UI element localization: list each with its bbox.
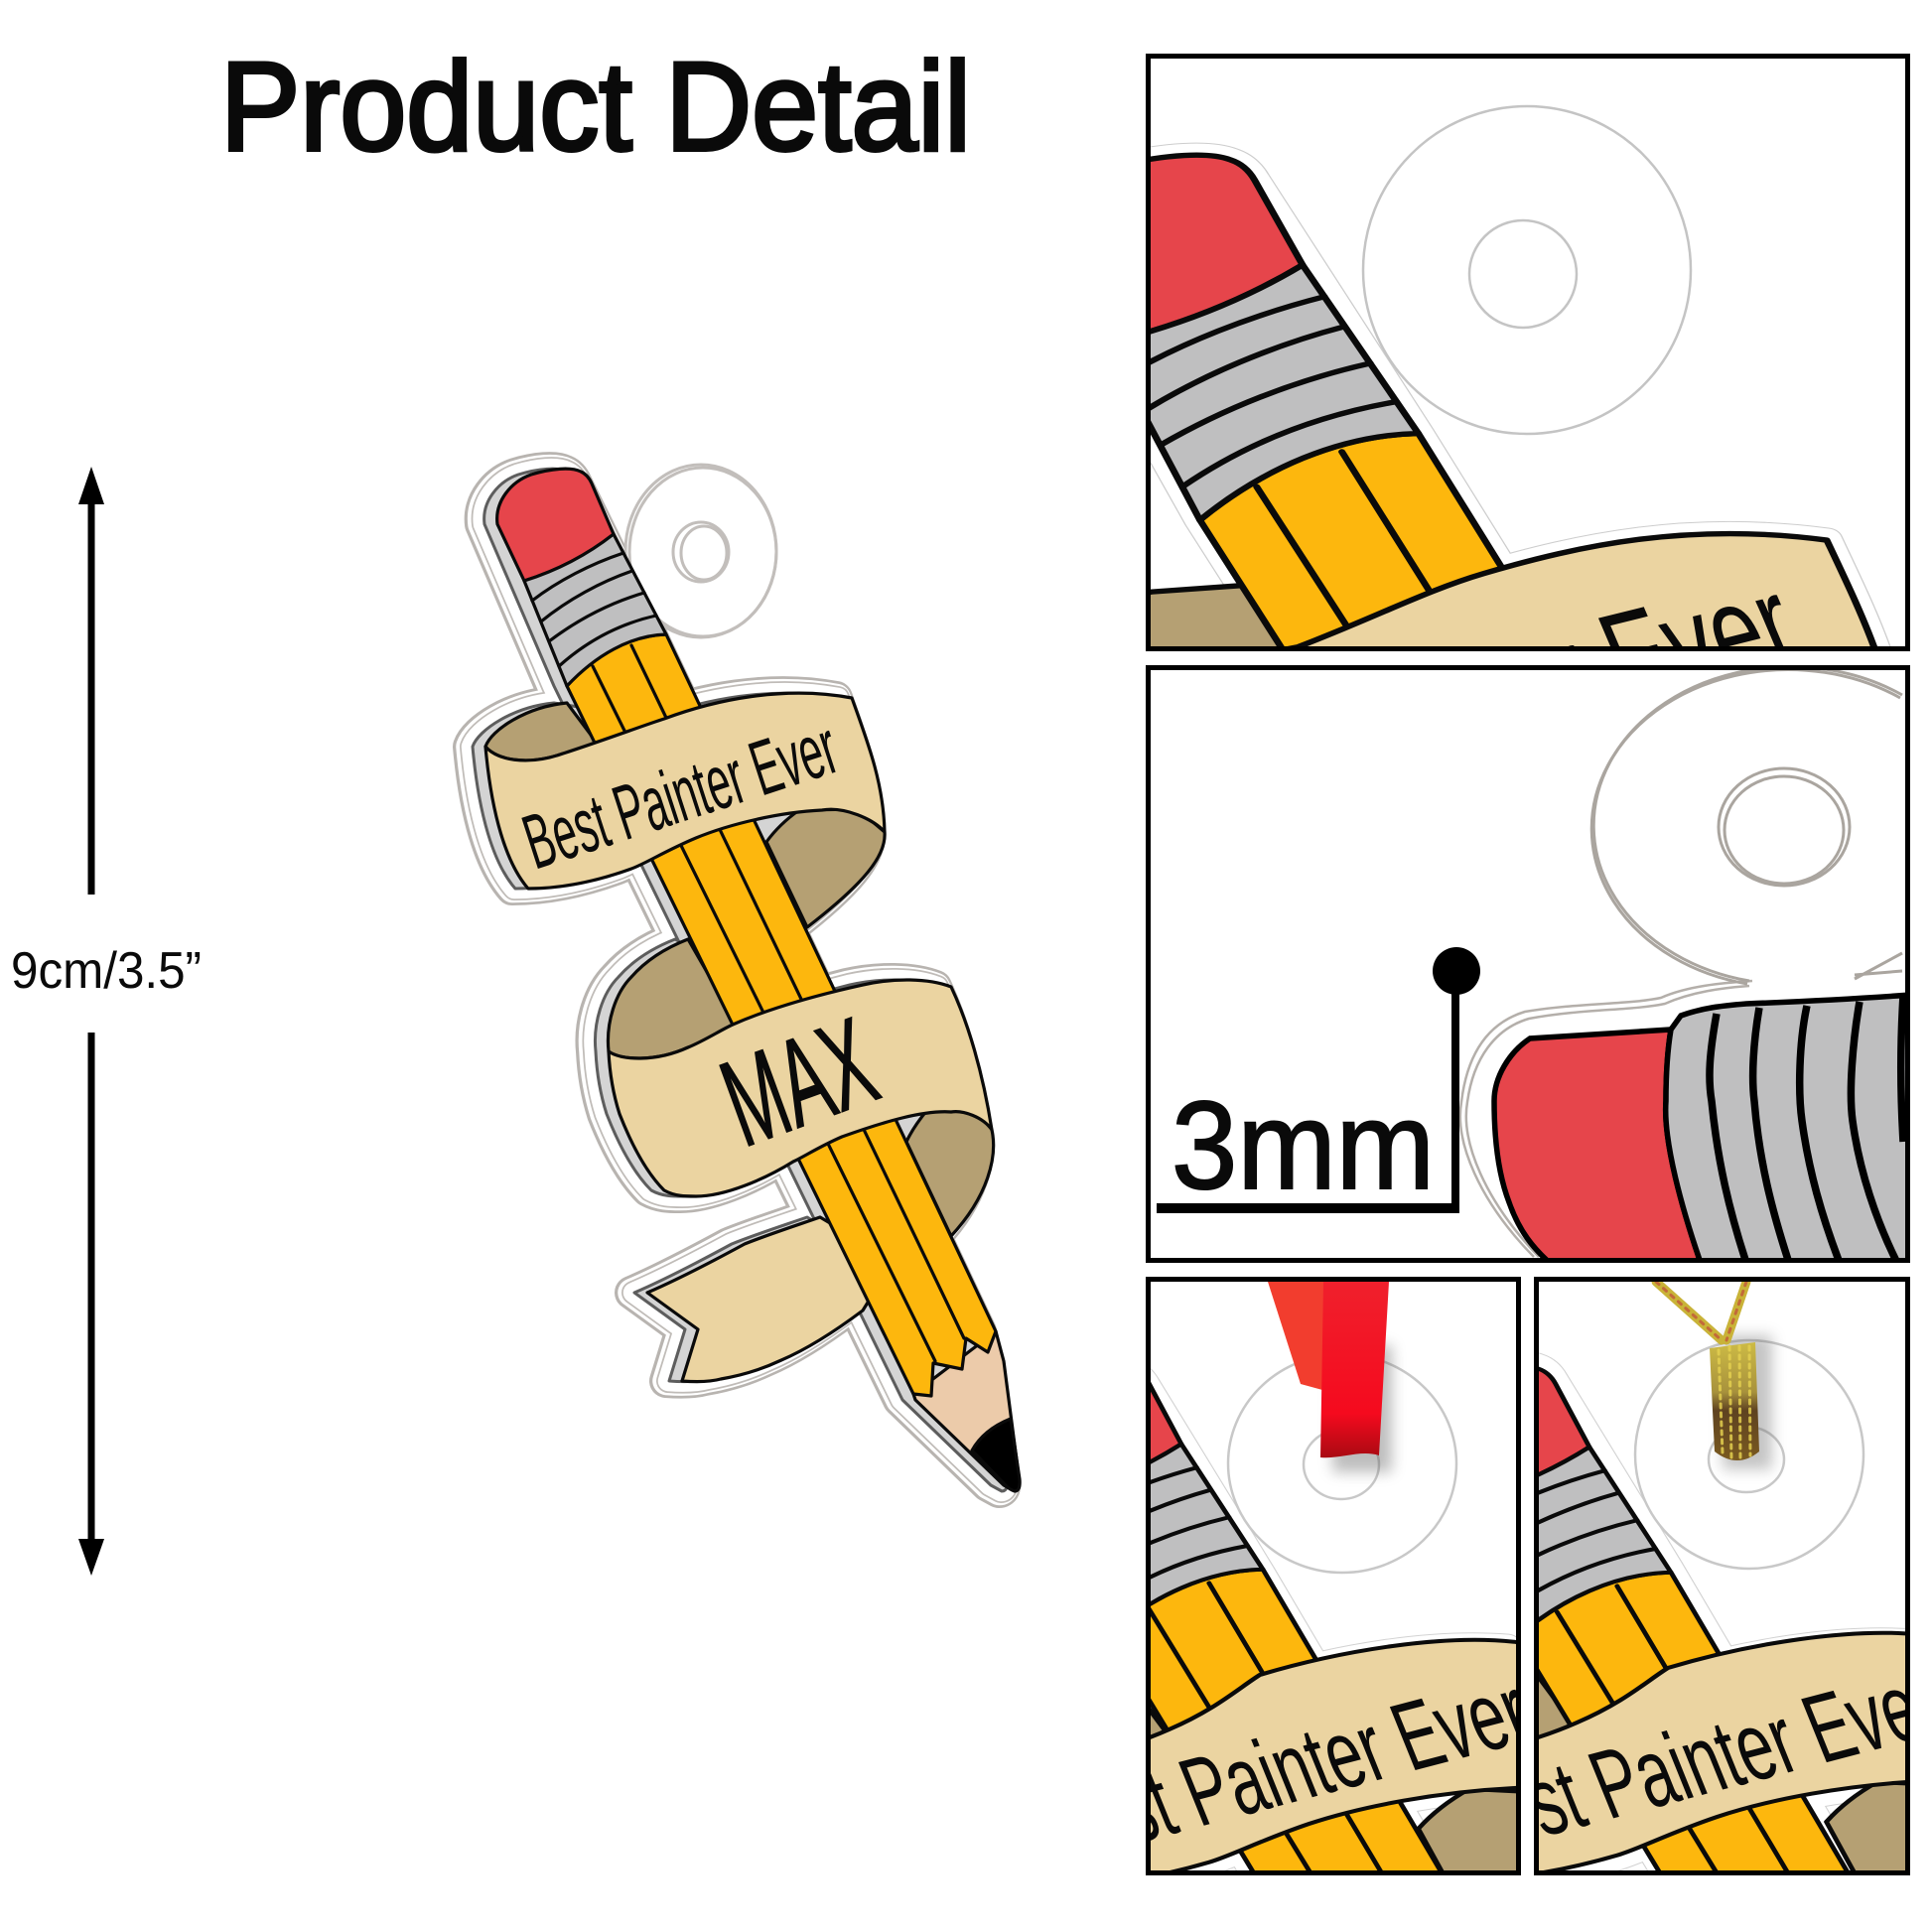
disc with hole — [1363, 106, 1691, 434]
ferrule — [1666, 995, 1911, 1263]
pencil close-up — [1539, 1366, 1905, 1870]
pencil close-up: Best Painter Ever — [1027, 1656, 1545, 1883]
banner text: MAX: MAX — [706, 992, 893, 1173]
red ribbon — [1268, 1282, 1389, 1457]
main product: pencil ornament — [470, 465, 1020, 1491]
hanging hole disc — [625, 465, 776, 637]
acrylic outline — [470, 469, 1007, 1491]
3mm label: 3mm — [1172, 1077, 1435, 1215]
panel: close-up of hole — [1146, 54, 1910, 651]
disc with hole — [1635, 1340, 1863, 1569]
pencil and banner art — [485, 469, 1020, 1491]
eraser — [1494, 1030, 1701, 1263]
3mm measure marker — [1157, 947, 1480, 1213]
ferrule bands — [1710, 996, 1903, 1263]
disc with hole — [1228, 1354, 1456, 1573]
panel frame — [1537, 1279, 1908, 1872]
panel frame — [1148, 1279, 1519, 1872]
cord shadow — [1723, 1335, 1772, 1469]
gold cord — [1656, 1282, 1759, 1460]
pencil close-up — [1151, 1382, 1516, 1870]
banner text: Best Painter Ever: Best Painter Ever — [513, 703, 848, 886]
dimension label: 9cm/3.5” — [11, 942, 202, 1000]
acrylic outline — [1539, 1352, 1905, 1870]
arrow: downward — [78, 1033, 104, 1576]
panel frame — [1148, 667, 1908, 1261]
arrow: upward — [78, 467, 104, 895]
disc with hole — [1591, 667, 1902, 984]
pencil close-up — [1151, 153, 1877, 646]
ribbon shadow — [1332, 1345, 1392, 1472]
acrylic outline — [1151, 1368, 1516, 1870]
panel: gold cord option — [1534, 1277, 1910, 1875]
panel: red ribbon option — [1146, 1277, 1521, 1875]
panel: 3mm thickness — [1148, 667, 1911, 1263]
panel art: acrylic outline — [1151, 143, 1890, 646]
title: Product Detail — [220, 36, 971, 177]
acrylic edge outline — [1460, 981, 1752, 1257]
dimension arrow: height — [11, 467, 202, 1576]
panel frame — [1148, 56, 1908, 649]
